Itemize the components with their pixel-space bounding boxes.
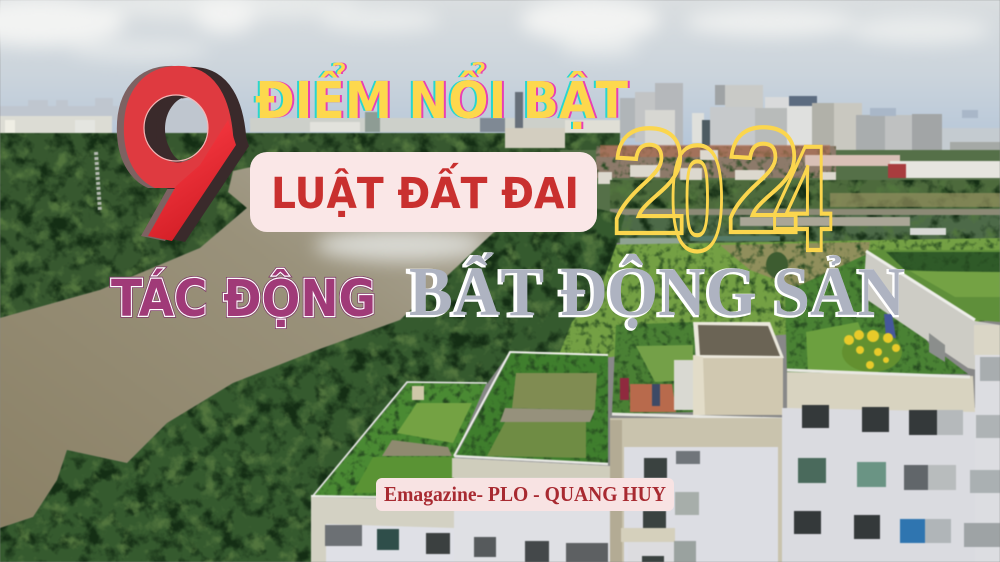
- right wing: [782, 355, 1000, 562]
- heading: TÁC ĐỘNG: TÁC ĐỘNG: [111, 268, 376, 329]
- far tree line and horizon: [0, 128, 620, 178]
- left wing rooftop garden: [312, 382, 487, 497]
- river: [0, 165, 500, 528]
- outlined year 2024: 0: [669, 116, 726, 283]
- heading: ĐIỂM NỔI BẬT: ĐIỂM NỔI BẬT: [253, 61, 626, 131]
- middle rooftop garden: [454, 352, 608, 464]
- credit pill: Emagazine- PLO - QUANG HUY: [384, 482, 666, 506]
- left forest bank: [0, 135, 255, 318]
- yellow flower bush: [842, 330, 902, 372]
- pill: LUẬT ĐẤT ĐAI: [250, 152, 597, 232]
- nine: grey and dark back layers: 9: [112, 21, 232, 295]
- terrace with laundry: [612, 322, 782, 419]
- heading: BẤT ĐỘNG SẢN: BẤT ĐỘNG SẢN: [409, 252, 905, 331]
- nine: grey and dark back layers: [116, 66, 249, 242]
- upper right rooftop garden wing: [785, 250, 1000, 375]
- heading: BẤT ĐỘNG SẢN: BẤT ĐỘNG SẢN: [406, 253, 904, 332]
- left wing facade: [311, 458, 610, 562]
- outlined year 2024: 2: [612, 98, 687, 266]
- rooftop water tank box: [693, 322, 784, 415]
- lower forest: [0, 200, 625, 562]
- big red number 9: [112, 21, 252, 296]
- outlined year 2024: [612, 97, 831, 283]
- green fields: [550, 238, 1000, 360]
- heading: ĐIỂM NỔI BẬT: ĐIỂM NỔI BẬT: [255, 61, 628, 131]
- central tower windows: [642, 451, 700, 562]
- nine: red front face: 9: [119, 21, 239, 295]
- credit pill: [376, 478, 674, 511]
- outlined year 2024: 2: [726, 97, 801, 265]
- sky with clouds: [0, 0, 1000, 150]
- far skyline left: [0, 92, 570, 137]
- pill: LUẬT ĐẤT ĐAI: LUẬT ĐẤT ĐAI: [271, 162, 579, 219]
- left wing windows: [325, 525, 608, 562]
- right wing windows: [794, 357, 1000, 547]
- central tower: [610, 418, 794, 562]
- outlined year 2024: 4: [773, 116, 831, 282]
- heading: ĐIỂM NỔI BẬT: ĐIỂM NỔI BẬT: [257, 61, 630, 131]
- city towers right: [565, 83, 1000, 160]
- nine: red front face: [124, 66, 236, 241]
- nine: grey and dark back layers: 9: [132, 22, 252, 296]
- heading: TÁC ĐỘNG: TÁC ĐỘNG: [111, 268, 376, 329]
- villas and mid-ground town: [560, 145, 1000, 247]
